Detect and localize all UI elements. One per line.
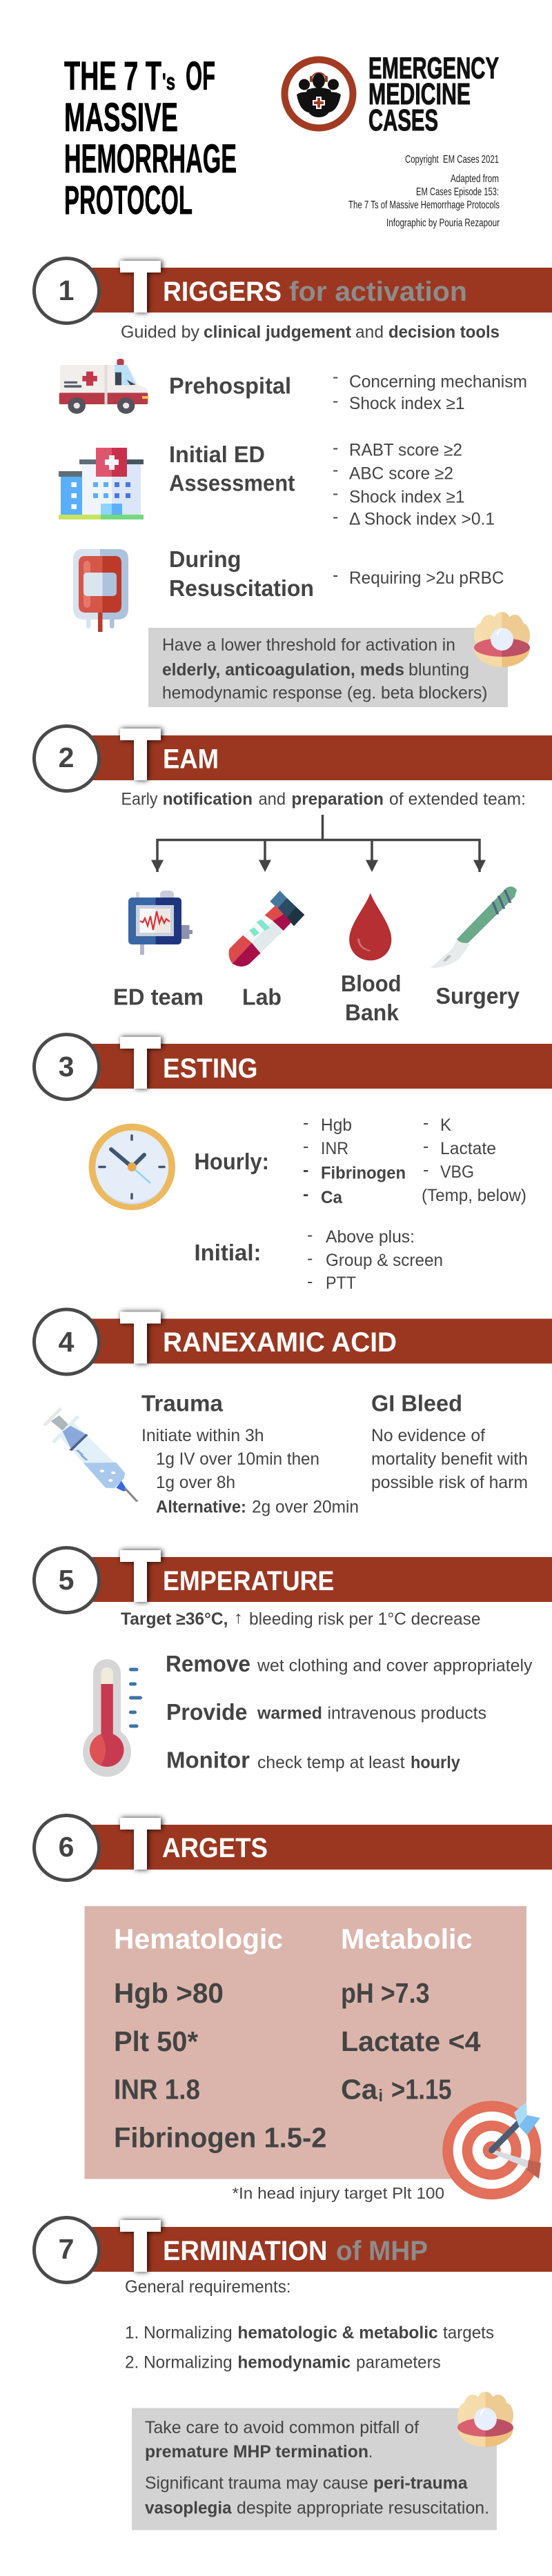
logo wordmark: MEDICINE xyxy=(368,77,471,111)
callout: premature termination: . xyxy=(368,2442,373,2461)
section 6 header: targets: 6 xyxy=(59,1831,74,1863)
callout: lower threshold xyxy=(148,628,508,707)
temperature action: remove xyxy=(166,1651,533,1676)
prehospital criteria list xyxy=(333,367,527,413)
icon: pearl xyxy=(474,612,530,667)
hourly test list column 2: - xyxy=(423,1137,428,1156)
hourly test list column 1 xyxy=(303,1113,406,1207)
credits text xyxy=(348,154,500,229)
initial ED criteria list: - xyxy=(333,438,338,457)
heading: during resuscitation xyxy=(169,546,314,601)
hourly test list column 1: Fibrinogen xyxy=(321,1163,406,1182)
trauma column: 2g over 20min xyxy=(252,1497,359,1516)
section 1 header: triggers: for activation xyxy=(289,277,467,307)
icon: syringe xyxy=(43,1407,137,1502)
hematologic column: Hgb >80 xyxy=(114,1977,224,2009)
metabolic column: >1.15 xyxy=(391,2074,451,2106)
termination requirements text: parameters xyxy=(356,2352,441,2372)
temperature action: remove: Remove xyxy=(166,1651,250,1676)
hourly test list column 1: - xyxy=(303,1137,308,1156)
hematologic column: Plt 50* xyxy=(114,2025,198,2057)
callout: premature termination: Take care to avoid common pitfall of xyxy=(145,2418,419,2437)
icon: hospital xyxy=(59,448,144,519)
icon: pearl xyxy=(457,2392,513,2447)
triggers intro text: Guided by xyxy=(121,323,199,342)
team intro text: Early xyxy=(121,789,158,809)
initial test list: - xyxy=(307,1225,313,1245)
triggers intro text: clinical judgement xyxy=(204,323,352,342)
temperature target text: bleeding risk per 1°C decrease xyxy=(249,1609,480,1629)
heading: initial ED assessment: Initial ED xyxy=(169,442,265,467)
section 7 header: termination: of MHP xyxy=(336,2236,428,2266)
section 2 header: team: EAM xyxy=(163,744,219,774)
initial ED criteria list: ABC score ≥2 xyxy=(349,464,453,483)
metabolic column: Lactate <4 xyxy=(341,2025,481,2057)
team intro text: and xyxy=(258,789,286,809)
icon: ambulance xyxy=(59,359,148,414)
metabolic column xyxy=(341,1923,481,2106)
credits text: EM Cases Episode 153: xyxy=(416,186,499,198)
metabolic column: Ca xyxy=(341,2074,378,2106)
hourly test list column 2: VBG xyxy=(440,1162,474,1182)
termination requirements text: targets xyxy=(443,2324,494,2343)
section 7 header: termination: ERMINATION xyxy=(163,2236,327,2266)
initial ED criteria list: - xyxy=(333,460,338,479)
temperature target text: ↑ xyxy=(234,1608,243,1627)
initial test list: Above plus: xyxy=(326,1227,415,1247)
section 5 header: temperature xyxy=(34,1548,552,1613)
callout: lower threshold: elderly, anticoagulation, meds xyxy=(162,660,404,680)
section 2 header: team xyxy=(34,726,552,791)
hourly test list column 1: Ca xyxy=(321,1188,343,1207)
initial ED criteria list: - xyxy=(333,507,338,526)
credits text: Adapted from xyxy=(451,173,499,185)
initial test list: Group & screen xyxy=(326,1251,443,1270)
termination requirements text: hematologic & metabolic xyxy=(237,2324,438,2343)
triggers intro text: and xyxy=(355,323,384,342)
termination requirements text: hemodynamic xyxy=(237,2352,351,2372)
icon: clock xyxy=(89,1124,175,1210)
section 2 header: team: 2 xyxy=(59,742,74,773)
termination requirements text xyxy=(125,2277,494,2372)
callout: lower threshold: blunting xyxy=(408,660,469,680)
prehospital criteria list: Shock index ≥1 xyxy=(349,394,465,413)
icon: blood drop xyxy=(349,893,391,960)
GI bleed column xyxy=(371,1391,528,1492)
logo wordmark xyxy=(368,51,499,137)
title: HEMORRHAGE xyxy=(64,137,237,181)
title: 's xyxy=(162,69,175,95)
targets footnote: *In head injury target Plt 100 xyxy=(232,2184,444,2202)
team intro text: preparation xyxy=(291,789,384,809)
section 7 header: termination: 7 xyxy=(59,2233,74,2265)
section 4 header: tranexamic acid: RANEXAMIC ACID xyxy=(163,1327,397,1358)
temperature action: monitor: Monitor xyxy=(166,1747,250,1773)
panel: targets table xyxy=(84,1906,526,2179)
heading: initial ED assessment xyxy=(169,442,295,495)
section 4 header: tranexamic acid: 4 xyxy=(59,1326,75,1358)
section 5 header: temperature: 5 xyxy=(59,1564,74,1596)
GI bleed column: mortality benefit with xyxy=(371,1449,528,1469)
hematologic column xyxy=(114,1923,327,2154)
GI bleed column: GI Bleed xyxy=(371,1391,462,1416)
hourly test list column 2: Lactate xyxy=(440,1139,496,1158)
section 3 header: testing: ESTING xyxy=(163,1053,258,1084)
callout: lower threshold: Have a lower threshold for activation in xyxy=(162,635,455,655)
temperature action: provide: intravenous products xyxy=(327,1704,486,1723)
trauma column xyxy=(141,1391,359,1516)
hourly test list column 2: (Temp, below) xyxy=(422,1186,526,1205)
initial test list xyxy=(307,1225,443,1293)
callout: premature termination: vasoplegia xyxy=(145,2499,233,2518)
hematologic column: INR 1.8 xyxy=(114,2074,200,2106)
prehospital criteria list: - xyxy=(333,391,338,410)
termination requirements text: 2. Normalizing xyxy=(125,2352,233,2372)
triggers intro text xyxy=(121,323,500,342)
title: MASSIVE xyxy=(64,95,178,140)
callout: premature termination xyxy=(132,2408,497,2530)
resuscitation criteria: Requiring >2u pRBC xyxy=(349,568,504,588)
initial test list: - xyxy=(307,1249,313,1268)
callout: premature termination: Significant trauma may cause xyxy=(145,2474,368,2493)
temperature action: monitor xyxy=(166,1747,460,1773)
hourly test list column 1: Hgb xyxy=(321,1116,352,1135)
title: PROTOCOL xyxy=(64,178,193,223)
team labels: ED team xyxy=(113,984,204,1010)
icon: ED monitor xyxy=(128,891,193,955)
logo wordmark: CASES xyxy=(368,103,438,137)
title xyxy=(64,54,237,223)
team labels: Surgery xyxy=(436,983,520,1009)
prehospital criteria list: Concerning mechanism xyxy=(349,373,527,392)
temperature action: provide: warmed xyxy=(257,1704,322,1723)
hourly test list column 2: - xyxy=(423,1160,428,1180)
GI bleed column: possible risk of harm xyxy=(371,1473,528,1492)
trauma column: 1g over 8h xyxy=(156,1473,235,1492)
hematologic column: Fibrinogen 1.5-2 xyxy=(114,2122,327,2154)
hourly test list column 1: - xyxy=(303,1113,308,1133)
icon: thermometer xyxy=(83,1659,142,1777)
temperature action: provide: Provide xyxy=(166,1699,247,1725)
hourly test list column 2 xyxy=(422,1113,526,1205)
section 3 header: testing: 3 xyxy=(59,1051,74,1082)
temperature target text xyxy=(121,1608,480,1629)
icon: emergency medicine cases logo xyxy=(284,59,353,128)
initial ED criteria list: Δ Shock index >0.1 xyxy=(349,509,495,528)
termination requirements text: 1. Normalizing xyxy=(125,2324,233,2343)
section 7 header: termination xyxy=(34,2217,552,2282)
initial test list: - xyxy=(307,1272,313,1291)
team intro text: of extended team: xyxy=(389,789,526,809)
trauma column: 1g IV over 10min then xyxy=(156,1449,319,1469)
credits text: The 7 Ts of Massive Hemorrhage Protocols xyxy=(348,199,500,211)
temperature action: monitor: hourly xyxy=(411,1753,460,1772)
icon: lab test tube xyxy=(229,891,304,967)
team labels: Blood xyxy=(341,971,402,996)
metabolic column: pH >7.3 xyxy=(341,1977,429,2009)
heading: hourly: Hourly: xyxy=(195,1149,269,1174)
metabolic column: Metabolic xyxy=(341,1923,472,1955)
arrows: team branches xyxy=(151,815,486,872)
section 5 header: temperature: EMPERATURE xyxy=(163,1566,334,1596)
trauma column: Initiate within 3h xyxy=(141,1426,264,1445)
section 6 header: targets xyxy=(34,1816,552,1881)
team labels xyxy=(113,971,520,1025)
GI bleed column: No evidence of xyxy=(371,1426,485,1445)
initial ED criteria list: Shock index ≥1 xyxy=(349,487,465,506)
hourly test list column 2: K xyxy=(440,1116,451,1135)
title: OF xyxy=(186,54,215,99)
heading: prehospital: Prehospital xyxy=(169,373,291,399)
icon: scalpel xyxy=(430,886,517,968)
callout: lower threshold: hemodynamic response (eg. beta blockers) xyxy=(162,683,487,702)
callout: premature termination: premature MHP termination xyxy=(145,2442,368,2461)
termination requirements text: General requirements: xyxy=(125,2277,291,2297)
heading: initial: Initial: xyxy=(195,1240,261,1265)
callout: premature termination: despite appropriate resuscitation. xyxy=(237,2499,489,2518)
resuscitation criteria: - xyxy=(333,566,338,585)
trauma column: Alternative: xyxy=(156,1497,246,1516)
team labels: Bank xyxy=(345,1000,400,1025)
callout: premature termination: peri-trauma xyxy=(373,2474,469,2493)
team labels: Lab xyxy=(242,984,282,1010)
credits text: Copyright EM Cases 2021 xyxy=(405,154,499,166)
prehospital criteria list: - xyxy=(333,367,338,386)
initial ED criteria list: - xyxy=(333,484,338,503)
icon: target with dart xyxy=(442,2101,541,2199)
initial test list: PTT xyxy=(326,1274,356,1293)
temperature action: remove: wet clothing and cover appropriately xyxy=(257,1656,533,1675)
hematologic column: Hematologic xyxy=(114,1923,283,1955)
section 1 header: triggers: RIGGERS xyxy=(163,277,282,307)
heading: during resuscitation: During xyxy=(169,546,241,572)
metabolic column: i xyxy=(378,2086,383,2106)
hourly test list column 1: - xyxy=(303,1160,308,1180)
section 3 header: testing xyxy=(34,1035,552,1100)
section 6 header: targets: ARGETS xyxy=(162,1833,268,1863)
temperature action: monitor: check temp at least xyxy=(257,1753,405,1772)
hourly test list column 1: - xyxy=(303,1185,308,1204)
team intro text: notification xyxy=(163,789,253,809)
heading: initial ED assessment: Assessment xyxy=(169,470,295,495)
temperature target text: Target ≥36°C, xyxy=(121,1609,228,1629)
team intro text xyxy=(121,789,526,809)
initial ED criteria list xyxy=(333,438,495,528)
hourly test list column 2: - xyxy=(423,1113,428,1133)
heading: during resuscitation: Resuscitation xyxy=(169,575,314,601)
temperature action: provide xyxy=(166,1699,486,1725)
section 1 header: triggers xyxy=(34,258,552,323)
credits text: Infographic by Pouria Rezapour xyxy=(386,217,500,229)
triggers intro text: decision tools xyxy=(388,323,500,342)
trauma column: Trauma xyxy=(141,1391,224,1416)
section 4 header: tranexamic acid xyxy=(34,1309,552,1374)
icon: blood bag xyxy=(73,549,128,632)
hourly test list column 1: INR xyxy=(321,1139,348,1158)
title: THE 7 T xyxy=(64,54,161,99)
initial ED criteria list: RABT score ≥2 xyxy=(349,440,462,459)
section 1 header: triggers: 1 xyxy=(59,275,74,306)
